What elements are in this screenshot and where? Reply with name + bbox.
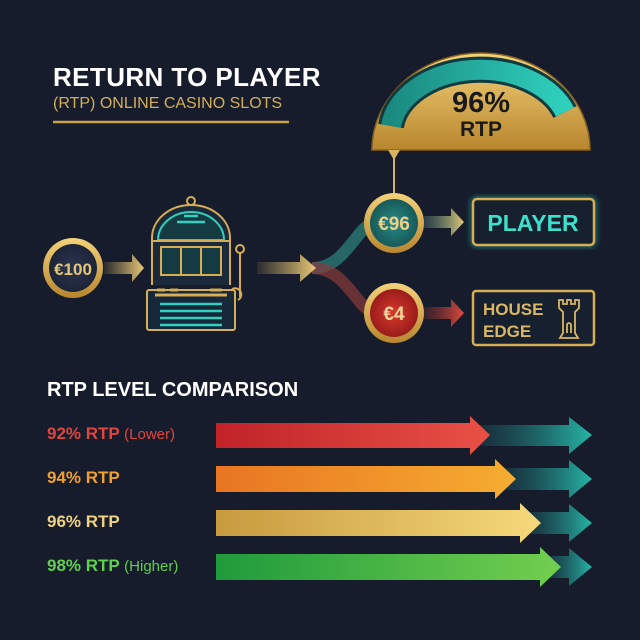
title: RETURN TO PLAYER: [53, 62, 321, 92]
arrow: 96 to player: [424, 208, 464, 236]
gauge label: [452, 87, 510, 141]
slot machine: [147, 197, 244, 330]
coin €4: €4: [383, 304, 405, 325]
gauge: [372, 53, 590, 194]
comparison bars: [216, 416, 592, 587]
coin €96: [364, 193, 424, 253]
labels: 96% RTP: [47, 512, 120, 531]
gauge label: 96%: [452, 87, 510, 119]
arrow: 4 to house: [424, 299, 464, 327]
labels: 98% RTP (Higher): [47, 556, 178, 575]
player box: PLAYER: [487, 210, 579, 236]
arrow: slot to branch: [257, 254, 316, 282]
comparison heading: RTP LEVEL COMPARISON: [47, 379, 298, 401]
arrow: coin to slot: [104, 254, 144, 282]
coin €100: €100: [54, 260, 92, 279]
branching curves: [312, 223, 372, 312]
house edge box: HOUSE: [483, 300, 543, 319]
coin €96: €96: [378, 214, 410, 235]
subtitle: (RTP) ONLINE CASINO SLOTS: [53, 95, 282, 112]
labels: [47, 424, 178, 575]
house edge box: [473, 291, 594, 345]
player box: [473, 199, 594, 245]
house edge box: EDGE: [483, 322, 531, 341]
coin €100: [43, 238, 103, 298]
coin €4: [364, 283, 424, 343]
gauge label: RTP: [460, 118, 502, 141]
labels: 92% RTP (Lower): [47, 424, 175, 443]
labels: 94% RTP: [47, 468, 120, 487]
